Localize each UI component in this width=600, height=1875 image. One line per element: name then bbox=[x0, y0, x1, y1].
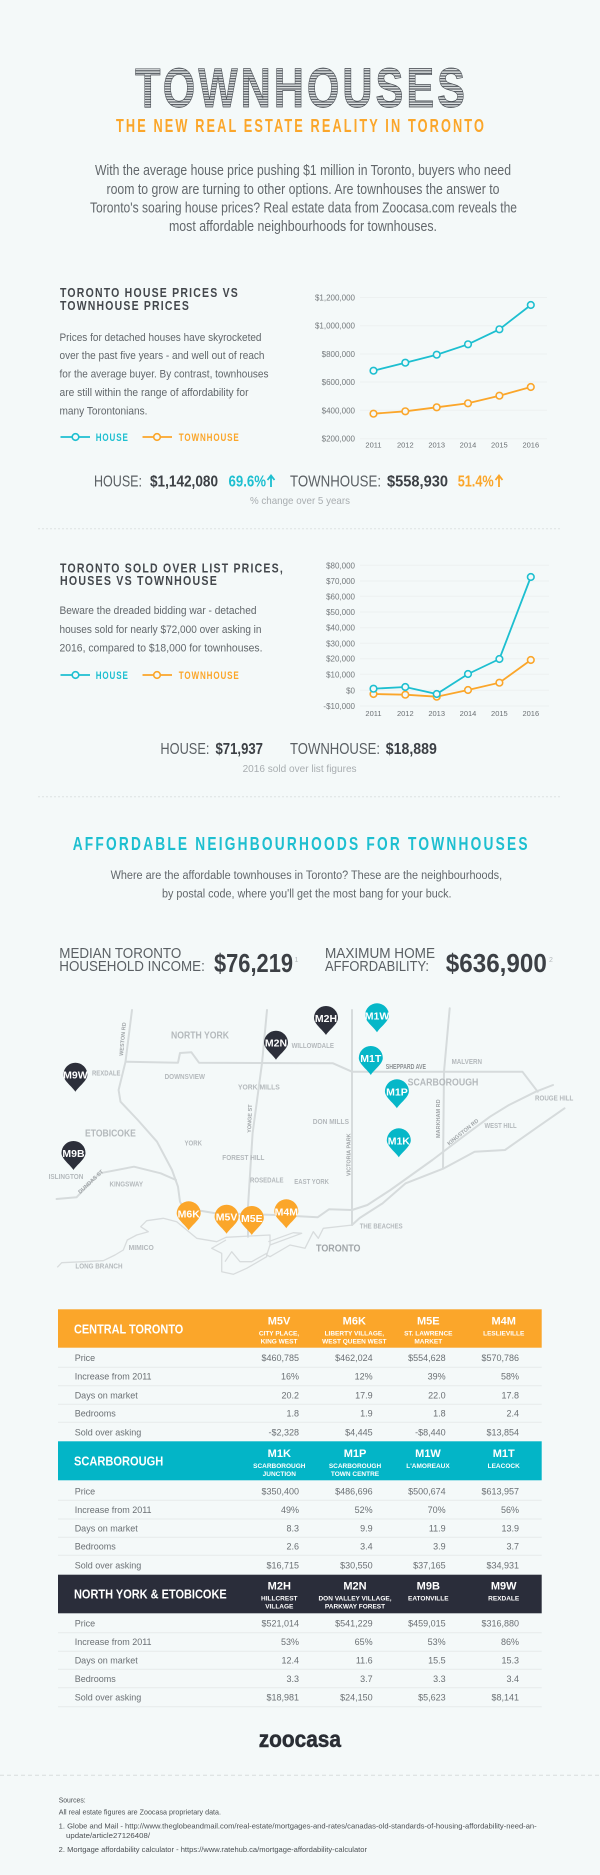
row: sold over asking: -$8,440 bbox=[415, 1428, 446, 1438]
line chart: sold over list: 2013 bbox=[428, 709, 445, 718]
row: increase from 2011: 16% bbox=[281, 1372, 299, 1382]
table header: scarborough: M1T bbox=[493, 1448, 515, 1460]
table header: north york and etobicoke: M9W bbox=[491, 1581, 517, 1593]
table header: scarborough: M1W bbox=[415, 1448, 441, 1460]
row: sold over asking: $13,854 bbox=[486, 1428, 519, 1438]
stats: house prices: $1,142,080 bbox=[150, 474, 218, 490]
line chart: sold over list: $10,000 bbox=[326, 670, 356, 679]
map of Toronto bbox=[49, 1003, 574, 1274]
row: price: $462,024 bbox=[335, 1353, 373, 1363]
text block: house prices: many Torontonians. bbox=[60, 406, 148, 418]
row: price bbox=[75, 1486, 519, 1496]
line chart: house prices bbox=[315, 293, 547, 450]
pin: M4M bbox=[274, 1199, 298, 1228]
row: increase from 2011: 52% bbox=[355, 1505, 373, 1515]
row: days on market: 15.3 bbox=[501, 1655, 519, 1665]
row: increase from 2011: Increase from 2011 bbox=[75, 1505, 152, 1515]
text block: sold over list: 2016, compared to $18,000 for townhouses. bbox=[60, 642, 262, 654]
row: price bbox=[75, 1618, 519, 1628]
text block: neighbourhoods intro: by postal code, where you'll get the most bang for your buck. bbox=[162, 889, 452, 901]
map: road labels: MARKHAM RD bbox=[436, 1099, 442, 1138]
text block: house prices: Prices for detached houses have skyrocketed bbox=[60, 332, 262, 344]
line chart: house prices: $1,200,000 bbox=[315, 293, 356, 302]
table header: scarborough: TOWN CENTRE bbox=[331, 1471, 380, 1478]
row: sold over asking: $34,931 bbox=[486, 1560, 519, 1570]
stats: house prices: 51.4% bbox=[458, 474, 494, 490]
row: price: $459,015 bbox=[408, 1618, 446, 1628]
legend: sold over list: TOWNHOUSE bbox=[179, 670, 240, 682]
row: sold over asking: $18,981 bbox=[266, 1693, 299, 1703]
map: place labels: MIMICO bbox=[129, 1245, 154, 1252]
table header: north york and etobicoke: NORTH YORK & ETOBICOKE bbox=[74, 1588, 227, 1602]
row: increase from 2011: 12% bbox=[355, 1372, 373, 1382]
map: place labels: SHEPPARD AVE bbox=[386, 1064, 426, 1071]
text block: neighbourhoods intro bbox=[111, 870, 502, 901]
map: place labels: YORK MILLS bbox=[238, 1084, 280, 1091]
row: sold over asking: Sold over asking bbox=[75, 1428, 141, 1438]
line chart: house prices: $800,000 bbox=[322, 350, 356, 359]
map: place labels: THE BEACHES bbox=[360, 1224, 403, 1231]
row: increase from 2011: 49% bbox=[281, 1505, 299, 1515]
line chart: house prices: 2012 bbox=[397, 440, 414, 450]
legend: sold over list bbox=[60, 670, 240, 682]
sources: update/article27126408/ bbox=[66, 1831, 151, 1840]
text block: house prices bbox=[60, 332, 269, 418]
pin: M2N bbox=[264, 1031, 288, 1060]
row: sold over asking: -$2,328 bbox=[268, 1428, 299, 1438]
table header: north york and etobicoke: DON VALLEY VILLAGE, bbox=[318, 1596, 392, 1603]
line chart: sold over list bbox=[323, 561, 549, 718]
line chart: house prices: 2011 bbox=[365, 440, 382, 450]
map: place labels: YORK bbox=[184, 1141, 202, 1148]
pin: M2N: M2N bbox=[265, 1038, 287, 1050]
stat: median household income: $76,219 bbox=[214, 948, 293, 978]
row: increase from 2011 bbox=[75, 1372, 519, 1382]
table header: central toronto: CENTRAL TORONTO bbox=[74, 1322, 184, 1336]
heading: sold over list bbox=[60, 560, 284, 588]
row: days on market: 12.4 bbox=[281, 1655, 299, 1665]
pin: M4M: M4M bbox=[275, 1206, 298, 1218]
map: roads bbox=[57, 1008, 564, 1237]
pin: M2H: M2H bbox=[315, 1013, 337, 1025]
pin: M1P bbox=[385, 1079, 409, 1108]
row: bedrooms bbox=[75, 1674, 519, 1684]
table header: north york and etobicoke bbox=[58, 1575, 542, 1613]
table header: central toronto: MARKET bbox=[414, 1338, 442, 1345]
pin: M1P: M1P bbox=[386, 1086, 408, 1098]
text block: house prices: over the past five years - and well out of reach bbox=[60, 350, 264, 362]
stats: sold over list: TOWNHOUSE: bbox=[290, 741, 380, 758]
row: days on market: 22.0 bbox=[428, 1390, 446, 1400]
row: price: Price bbox=[75, 1486, 95, 1496]
row: price: $460,785 bbox=[261, 1353, 299, 1363]
table header: scarborough: L'AMOREAUX bbox=[406, 1463, 450, 1470]
pin: M6K: M6K bbox=[178, 1208, 200, 1220]
map: road labels: VICTORIA PARK bbox=[347, 1133, 353, 1176]
row: bedrooms: 1.8 bbox=[433, 1409, 446, 1419]
row: bedrooms: Bedrooms bbox=[75, 1409, 116, 1419]
map: place labels: TORONTO bbox=[316, 1243, 360, 1255]
intro text: room to grow are turning to other options. Are townhouses the answer to bbox=[106, 181, 500, 198]
row: increase from 2011: 53% bbox=[281, 1637, 299, 1647]
row: bedrooms: 3.3 bbox=[433, 1674, 446, 1684]
panel: house prices vs townhouse prices bbox=[60, 285, 547, 507]
table header: central toronto: M6K bbox=[343, 1316, 366, 1328]
row: price: $486,696 bbox=[335, 1486, 373, 1496]
row: price: Price bbox=[75, 1618, 95, 1628]
line chart: sold over list: 2012 bbox=[397, 709, 414, 718]
sources: 2. Mortgage affordability calculator - https://www.ratehub.ca/mortgage-affordability-calculator bbox=[59, 1845, 368, 1854]
row: bedrooms bbox=[75, 1542, 519, 1552]
pin: M9B bbox=[62, 1141, 86, 1170]
row: increase from 2011 bbox=[75, 1637, 519, 1647]
table header: north york and etobicoke: HILLCREST bbox=[261, 1596, 298, 1603]
row: days on market bbox=[75, 1655, 519, 1665]
row: price: $613,957 bbox=[481, 1486, 519, 1496]
row: increase from 2011: 70% bbox=[428, 1505, 446, 1515]
map: place labels: REXDALE bbox=[92, 1071, 121, 1078]
title: TOWNHOUSES bbox=[135, 56, 468, 119]
stat: median household income bbox=[59, 946, 298, 978]
row: increase from 2011: 53% bbox=[428, 1637, 446, 1647]
map: place labels: NORTH YORK bbox=[171, 1029, 229, 1041]
row: days on market: 11.9 bbox=[429, 1523, 446, 1533]
heading: sold over list: HOUSES VS TOWNHOUSE bbox=[60, 573, 218, 588]
row: sold over asking bbox=[75, 1560, 519, 1570]
text block: house prices: are still within the range of affordability for bbox=[60, 387, 249, 399]
row: days on market: Days on market bbox=[75, 1523, 138, 1533]
sources bbox=[59, 1796, 537, 1854]
intro text bbox=[90, 162, 517, 235]
stat: maximum home affordability: 2 bbox=[549, 957, 553, 964]
text block: sold over list: Beware the dreaded bidding war - detached bbox=[60, 605, 256, 617]
pin: M1W: M1W bbox=[365, 1010, 389, 1022]
map: place labels: LONG BRANCH bbox=[75, 1264, 122, 1271]
row: bedrooms: Bedrooms bbox=[75, 1674, 116, 1684]
row: price: Price bbox=[75, 1353, 95, 1363]
row: sold over asking: $5,623 bbox=[418, 1693, 446, 1703]
line chart: house prices: $600,000 bbox=[322, 378, 356, 387]
line chart: sold over list: 2015 bbox=[491, 709, 508, 718]
heading: house prices: TOWNHOUSE PRICES bbox=[60, 298, 190, 313]
table header: central toronto: WEST QUEEN WEST bbox=[322, 1338, 386, 1345]
text block: sold over list bbox=[60, 605, 262, 654]
stat: maximum home affordability bbox=[325, 946, 553, 978]
row: days on market bbox=[75, 1523, 519, 1533]
row: increase from 2011: 56% bbox=[501, 1505, 519, 1515]
stat: median household income: 1 bbox=[294, 957, 298, 964]
map: place labels: WILLOWDALE bbox=[292, 1043, 334, 1050]
table header: north york and etobicoke: M2N bbox=[343, 1581, 367, 1593]
row: increase from 2011: Increase from 2011 bbox=[75, 1637, 152, 1647]
line chart: house prices: 2013 bbox=[428, 440, 445, 450]
row: sold over asking: $24,150 bbox=[340, 1693, 373, 1703]
table header: central toronto: M5E bbox=[417, 1316, 440, 1328]
row: price bbox=[75, 1353, 519, 1363]
pin: M1T bbox=[359, 1046, 383, 1075]
map: place labels: SCARBOROUGH bbox=[408, 1076, 478, 1088]
heading: sold over list: TORONTO SOLD OVER LIST PRICES, bbox=[60, 560, 284, 576]
line chart: sold over list: $80,000 bbox=[326, 561, 356, 570]
map: place labels: FOREST HILL bbox=[222, 1155, 265, 1162]
row: sold over asking bbox=[75, 1693, 519, 1703]
line chart: sold over list: $0 bbox=[346, 686, 356, 695]
line chart: sold over list: -$10,000 bbox=[323, 702, 356, 711]
heading: house prices bbox=[60, 285, 239, 313]
map: place labels: ETOBICOKE bbox=[85, 1128, 136, 1140]
pin: M5E: M5E bbox=[241, 1213, 263, 1225]
stat: maximum home affordability: MAXIMUM HOME bbox=[325, 946, 435, 962]
intro text: most affordable neighbourhoods for townhouses. bbox=[169, 218, 437, 235]
row: bedrooms: Bedrooms bbox=[75, 1542, 116, 1552]
text block: house prices: for the average buyer. By contrast, townhouses bbox=[60, 368, 269, 380]
pin: M9B: M9B bbox=[62, 1148, 85, 1160]
line chart: sold over list: $30,000 bbox=[326, 639, 356, 648]
row: price: $554,628 bbox=[408, 1353, 446, 1363]
row: sold over asking: $37,165 bbox=[413, 1560, 446, 1570]
row: increase from 2011 bbox=[75, 1505, 519, 1515]
note: percent change: % change over 5 years bbox=[250, 495, 350, 507]
row: sold over asking: $8,141 bbox=[491, 1693, 519, 1703]
stats: sold over list: $18,889 bbox=[386, 741, 437, 758]
sources: 1. Globe and Mail - http://www.theglobeandmail.com/real-estate/mortgages-and-rates/canadas-old-standards-of-housing-affordability-need-an- bbox=[59, 1821, 537, 1830]
table header: central toronto: LESLIEVILLE bbox=[483, 1331, 525, 1338]
line chart: sold over list: 2011 bbox=[365, 709, 382, 718]
map: place labels: KINGSWAY bbox=[110, 1181, 143, 1188]
table header: central toronto: M5V bbox=[268, 1316, 291, 1328]
stats: house prices: $558,930 bbox=[387, 474, 448, 490]
row: sold over asking bbox=[75, 1428, 519, 1438]
row: days on market bbox=[75, 1390, 519, 1400]
table header: north york and etobicoke: PARKWAY FOREST bbox=[325, 1604, 385, 1611]
map: place labels: ROSEDALE bbox=[250, 1178, 284, 1185]
table header: scarborough: M1K bbox=[268, 1448, 291, 1460]
pin: M2H bbox=[314, 1006, 338, 1035]
table header: scarborough: SCARBOROUGH bbox=[329, 1463, 381, 1470]
note: sold over list figures: 2016 sold over list figures bbox=[243, 763, 357, 775]
table header: scarborough: SCARBOROUGH bbox=[253, 1463, 306, 1470]
row: increase from 2011: 39% bbox=[428, 1372, 446, 1382]
row: bedrooms bbox=[75, 1409, 519, 1419]
row: price: $350,400 bbox=[261, 1486, 299, 1496]
panel: sold over list prices bbox=[60, 560, 549, 775]
legend: house prices bbox=[60, 432, 240, 444]
line chart: sold over list: 2014 bbox=[460, 709, 476, 718]
pin: M5V bbox=[215, 1205, 239, 1234]
text block: neighbourhoods intro: Where are the affordable townhouses in Toronto? These are the neighbourhoods, bbox=[111, 870, 502, 882]
line chart: house prices: 2014 bbox=[460, 440, 476, 450]
row: increase from 2011: 58% bbox=[501, 1372, 519, 1382]
line chart: sold over list: $50,000 bbox=[326, 608, 356, 617]
pin: M6K bbox=[177, 1201, 201, 1230]
row: bedrooms: 3.4 bbox=[360, 1542, 373, 1552]
stat: maximum home affordability: AFFORDABILITY: bbox=[325, 959, 429, 975]
map: place labels: ROUGE HILL bbox=[535, 1096, 574, 1103]
row: days on market: 15.5 bbox=[428, 1655, 446, 1665]
row: increase from 2011: Increase from 2011 bbox=[75, 1372, 152, 1382]
pin: M5V: M5V bbox=[216, 1212, 237, 1224]
intro text: With the average house price pushing $1 million in Toronto, buyers who need bbox=[95, 162, 511, 179]
line chart: house prices: $1,000,000 bbox=[315, 322, 356, 331]
row: days on market: 9.9 bbox=[360, 1523, 373, 1533]
row: bedrooms: 3.7 bbox=[506, 1542, 519, 1552]
legend: house prices: TOWNHOUSE bbox=[179, 432, 240, 444]
logo: zoocasa: zoocasa bbox=[259, 1726, 341, 1752]
line chart: house prices: 2016 bbox=[522, 440, 539, 450]
line chart: sold over list: $40,000 bbox=[326, 624, 356, 633]
row: sold over asking: $16,715 bbox=[266, 1560, 299, 1570]
pin: M1W bbox=[365, 1003, 389, 1032]
row: price: $541,229 bbox=[335, 1618, 373, 1628]
stats: house prices: HOUSE: bbox=[94, 474, 142, 490]
row: days on market: 20.2 bbox=[281, 1390, 299, 1400]
row: sold over asking: $30,550 bbox=[340, 1560, 373, 1570]
text block: sold over list: houses sold for nearly $72,000 over asking in bbox=[60, 624, 262, 636]
stat: median household income: MEDIAN TORONTO bbox=[59, 946, 181, 962]
stat: median household income: HOUSEHOLD INCOME: bbox=[59, 959, 205, 975]
line chart: sold over list: 2016 bbox=[522, 709, 539, 718]
row: price: $521,014 bbox=[261, 1618, 299, 1628]
pin: M9W: M9W bbox=[63, 1070, 88, 1082]
row: sold over asking: Sold over asking bbox=[75, 1560, 141, 1570]
table header: north york and etobicoke: M2H bbox=[268, 1581, 291, 1593]
table header: central toronto: KING WEST bbox=[261, 1338, 297, 1345]
map: place labels: DOWNSVIEW bbox=[165, 1074, 205, 1081]
table header: north york and etobicoke: REXDALE bbox=[488, 1596, 520, 1603]
table header: scarborough: LEACOCK bbox=[488, 1463, 520, 1470]
map: place labels: WEST HILL bbox=[484, 1123, 517, 1130]
stats: sold over list: HOUSE: bbox=[160, 741, 209, 758]
row: sold over asking: $4,445 bbox=[345, 1428, 373, 1438]
row: bedrooms: 3.3 bbox=[286, 1674, 299, 1684]
sources: Sources: bbox=[59, 1796, 86, 1805]
line chart: house prices: 2015 bbox=[491, 440, 508, 450]
table header: scarborough: JUNCTION bbox=[263, 1471, 296, 1478]
row: increase from 2011: 86% bbox=[501, 1637, 519, 1647]
sources: All real estate figures are Zoocasa proprietary data. bbox=[59, 1808, 221, 1817]
row: price: $500,674 bbox=[408, 1486, 446, 1496]
line chart: sold over list: $70,000 bbox=[326, 577, 356, 586]
stats: sold over list: $71,937 bbox=[216, 741, 263, 758]
row: bedrooms: 2.4 bbox=[506, 1409, 519, 1419]
table header: scarborough bbox=[58, 1441, 542, 1480]
table header: central toronto: CITY PLACE, bbox=[259, 1331, 299, 1338]
table header: scarborough: M1P bbox=[344, 1448, 366, 1460]
row: days on market: 13.9 bbox=[501, 1523, 519, 1533]
row: bedrooms: 3.7 bbox=[360, 1674, 373, 1684]
line chart: house prices: $400,000 bbox=[322, 406, 356, 415]
pin: M1K bbox=[387, 1128, 411, 1157]
map: place labels: DON MILLS bbox=[313, 1119, 349, 1126]
row: days on market: 11.6 bbox=[356, 1655, 373, 1665]
stats: house prices: 69.6% bbox=[228, 474, 266, 490]
table header: north york and etobicoke: M9B bbox=[417, 1581, 440, 1593]
table header: north york and etobicoke: EATONVILLE bbox=[408, 1596, 449, 1603]
row: days on market: Days on market bbox=[75, 1655, 138, 1665]
pin: M1K: M1K bbox=[388, 1135, 410, 1147]
row: price: $570,786 bbox=[481, 1353, 519, 1363]
table header: central toronto: LIBERTY VILLAGE, bbox=[325, 1331, 384, 1338]
stats: house prices: TOWNHOUSE: bbox=[290, 474, 381, 490]
line chart: house prices: $200,000 bbox=[322, 435, 356, 444]
map: road labels: KINGSTON RD bbox=[447, 1118, 480, 1147]
row: days on market: 17.9 bbox=[355, 1390, 373, 1400]
map: road labels: YONGE ST bbox=[247, 1104, 254, 1133]
row: bedrooms: 1.8 bbox=[286, 1409, 299, 1419]
map: place labels bbox=[49, 1029, 574, 1271]
map: road labels: DUNDAS ST bbox=[78, 1169, 106, 1195]
legend: sold over list: HOUSE bbox=[96, 670, 129, 682]
table header: north york and etobicoke: VILLAGE bbox=[265, 1604, 294, 1611]
row: sold over asking: Sold over asking bbox=[75, 1693, 141, 1703]
line chart: sold over list: $20,000 bbox=[326, 655, 356, 664]
row: increase from 2011: 65% bbox=[355, 1637, 373, 1647]
pin: M1T: M1T bbox=[360, 1053, 382, 1065]
line chart: sold over list: $60,000 bbox=[326, 592, 356, 601]
map: place labels: EAST YORK bbox=[294, 1179, 329, 1186]
table: scarborough bbox=[58, 1441, 542, 1570]
stats: house prices bbox=[94, 474, 502, 490]
heading: house prices: TORONTO HOUSE PRICES VS bbox=[60, 285, 239, 300]
table: central toronto bbox=[58, 1309, 542, 1438]
pin: M9W bbox=[63, 1063, 88, 1092]
pin: M5E bbox=[240, 1206, 264, 1235]
stats: sold over list bbox=[160, 741, 437, 758]
row: days on market: 17.8 bbox=[501, 1390, 519, 1400]
legend: house prices: HOUSE bbox=[96, 432, 129, 444]
row: bedrooms: 1.9 bbox=[360, 1409, 373, 1419]
map: place labels: ISLINGTON bbox=[49, 1174, 83, 1181]
stat: maximum home affordability: $636,900 bbox=[446, 948, 547, 978]
table header: central toronto: M4M bbox=[491, 1316, 516, 1328]
row: price: $316,880 bbox=[481, 1618, 519, 1628]
table: north york and etobicoke bbox=[58, 1575, 542, 1707]
row: days on market: Days on market bbox=[75, 1390, 138, 1400]
map: road labels bbox=[78, 1022, 480, 1195]
map: road labels: WESTON RD bbox=[119, 1022, 128, 1056]
table header: central toronto: ST. LAWRENCE bbox=[404, 1331, 453, 1338]
row: bedrooms: 2.6 bbox=[286, 1542, 299, 1552]
row: days on market: 8.3 bbox=[286, 1523, 299, 1533]
table header: central toronto bbox=[58, 1309, 542, 1348]
map: place labels: MALVERN bbox=[452, 1059, 482, 1066]
row: bedrooms: 3.9 bbox=[433, 1542, 446, 1552]
table header: scarborough: SCARBOROUGH bbox=[74, 1454, 163, 1468]
map: shoreline bbox=[57, 1218, 353, 1274]
row: bedrooms: 3.4 bbox=[506, 1674, 519, 1684]
